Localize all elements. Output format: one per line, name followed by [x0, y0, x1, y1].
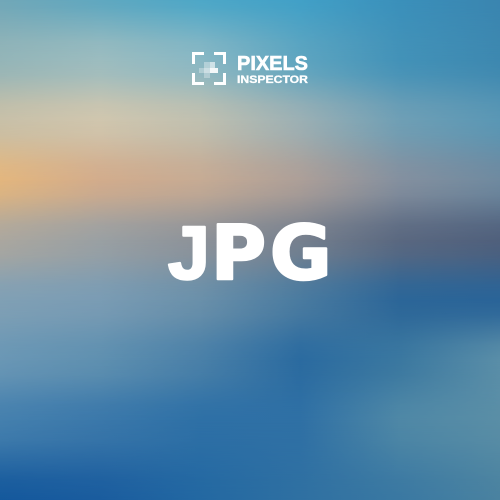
- title: JPG: J: [168, 211, 210, 295]
- logo: Pixels Inspector: [194, 52, 308, 86]
- wordmark: INSPECTOR: INSPECTOR: [237, 74, 308, 86]
- icon: viewfinder with pixels: [194, 54, 224, 84]
- title: JPG: P: [211, 209, 266, 297]
- wordmark: PIXELS: PIXELS: [237, 52, 308, 75]
- title: JPG: G: [270, 209, 332, 297]
